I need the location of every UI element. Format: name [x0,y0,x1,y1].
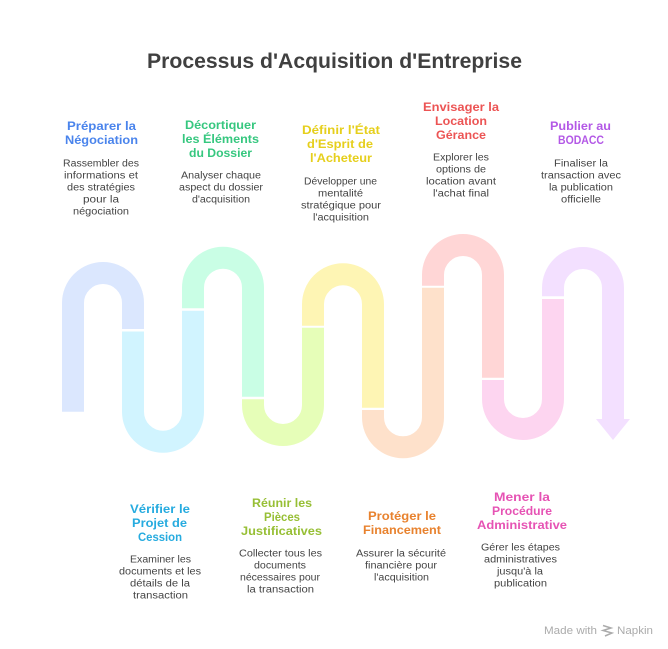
step: mener la procédure administrative: publication [494,578,547,590]
step: définir l'état d'esprit de l'acheteur: l'Acheteur [310,153,373,165]
step: définir l'état d'esprit de l'acheteur: mentalité [318,188,363,200]
step: protéger le financement: Protéger le [368,511,436,523]
step: publier au bodacc: la publication [549,182,613,194]
step: vérifier le projet de cession: Vérifier le [130,504,190,516]
watermark: made with napkin: Made with [544,625,597,637]
segment: réunir les pièces [253,328,313,435]
segment: publier au bodacc [553,258,613,419]
step: vérifier le projet de cession: documents et les [119,566,201,578]
step: décortiquer les éléments du dossier: les Éléments [182,133,259,146]
step: protéger le financement: Assurer la sécurité [356,548,446,560]
step: mener la procédure administrative: Gérer les étapes [481,542,560,554]
step: mener la procédure administrative: Administrative [477,520,567,532]
icon: napkin logo [603,626,612,636]
step: préparer la négociation: Préparer la [67,121,137,133]
step: protéger le financement: l'acquisition [374,572,429,584]
step: décortiquer les éléments du dossier: du Dossier [189,148,253,160]
step: définir l'état d'esprit de l'acheteur: Développer une [304,176,377,188]
step: vérifier le projet de cession [119,504,201,602]
step: mener la procédure administrative [477,492,567,590]
step: mener la procédure administrative: jusqu'à la [496,566,543,578]
step: décortiquer les éléments du dossier: Décortiquer [185,120,257,132]
step: vérifier le projet de cession: Cession [138,532,182,544]
segment: envisager la location gérance [433,245,493,378]
step: préparer la négociation: Négociation [65,135,138,147]
step: protéger le financement: Financement [363,525,441,537]
step: mener la procédure administrative: Mener la [494,492,551,504]
step: vérifier le projet de cession: Examiner les [130,554,191,566]
step: décortiquer les éléments du dossier [179,120,264,206]
step: publier au bodacc [541,121,621,206]
step: envisager la location gérance: l'achat final [433,188,489,200]
step: définir l'état d'esprit de l'acheteur: stratégique pour [301,200,382,212]
step: publier au bodacc: Finaliser la [554,158,608,170]
step: réunir les pièces justificatives: documents [254,560,306,572]
step: réunir les pièces justificatives: Pièces [264,512,300,524]
step: décortiquer les éléments du dossier: Analyser chaque [181,170,261,182]
step: définir l'état d'esprit de l'acheteur: l'acquisition [313,212,369,224]
step: envisager la location gérance: Explorer les [433,152,489,164]
step: réunir les pièces justificatives: nécessaires pour [240,572,321,584]
segment: préparer la négociation [73,273,133,412]
step: définir l'état d'esprit de l'acheteur [301,124,382,224]
step: définir l'état d'esprit de l'acheteur: Définir l'État [302,124,380,137]
watermark: made with napkin [544,625,653,637]
step: vérifier le projet de cession: transaction [133,590,188,602]
step: protéger le financement: financière pour [365,560,438,572]
step: définir l'état d'esprit de l'acheteur: d'Esprit de [307,139,373,151]
step: préparer la négociation: négociation [73,206,129,218]
step: réunir les pièces justificatives: la transaction [247,584,314,596]
segment: mener la procédure [493,299,553,429]
step: envisager la location gérance [423,102,500,200]
step: réunir les pièces justificatives: Justificatives [241,526,322,538]
step: vérifier le projet de cession: détails de la [130,578,190,590]
step: préparer la négociation: Rassembler des [63,158,139,170]
step: mener la procédure administrative: Procédure [492,506,552,518]
step: publier au bodacc: Publier au [550,121,611,133]
segment: vérifier le projet de cession [133,311,193,442]
step: réunir les pièces justificatives: Réunir les [252,498,312,510]
title: Processus d'Acquisition d'Entreprise [147,50,522,73]
watermark: made with napkin: Napkin [617,625,653,637]
segment: décortiquer les éléments [193,258,253,397]
step: envisager la location gérance: Gérance [436,130,486,142]
step: décortiquer les éléments du dossier: d'acquisition [192,194,250,206]
step: publier au bodacc: transaction avec [541,170,621,182]
step: préparer la négociation: des stratégies [67,182,135,194]
segment: définir l'état d'esprit [313,274,373,408]
step: protéger le financement [356,511,446,584]
step: vérifier le projet de cession: Projet de [132,518,187,530]
step: envisager la location gérance: Envisager la [423,102,500,114]
step: envisager la location gérance: Location [435,116,487,128]
step: préparer la négociation [63,121,139,218]
step: envisager la location gérance: options de [436,164,486,176]
step: publier au bodacc: officielle [561,194,601,206]
step: décortiquer les éléments du dossier: aspect du dossier [179,182,264,194]
segment: protéger le financement [373,288,433,447]
step: envisager la location gérance: location avant [426,176,496,188]
winding path [73,245,613,447]
step: publier au bodacc: BODACC [558,135,604,147]
step: mener la procédure administrative: administratives [484,554,557,566]
step: préparer la négociation: pour la [83,194,120,206]
step: préparer la négociation: informations et [64,170,138,182]
step: réunir les pièces justificatives: Collecter tous les [239,548,322,560]
arrow head [596,419,630,440]
step: réunir les pièces justificatives [239,498,322,596]
